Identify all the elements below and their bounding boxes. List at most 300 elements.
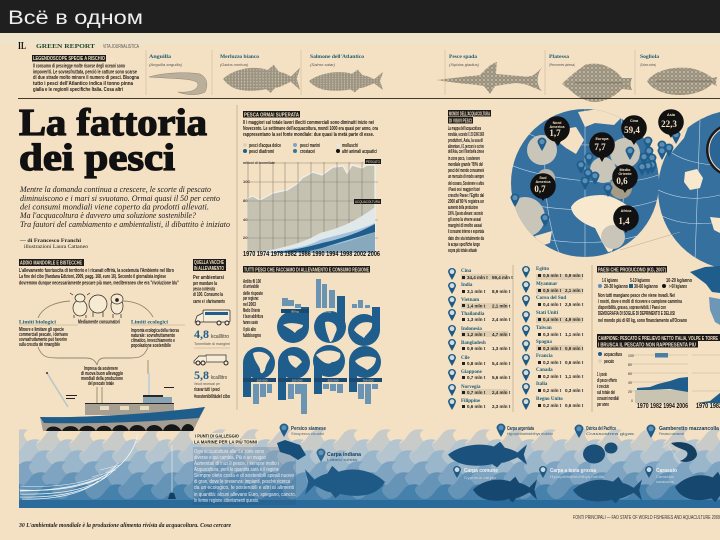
row: Francia: 0,2 mln t [543,360,562,365]
subtitle: dei consumi mondiali viene coperto da prodotti allevati. [20,202,209,212]
panel: fish and meat comparison: 1 i posto [597,372,607,378]
panel: floating cages text: da un ecologico, le sostenibili e altri ai alimenti [194,485,294,491]
panel: world maps of food: fabbisogno [243,333,261,339]
panel: floating cages text: di gran, dove le presenza: impianti, pesche ricerca [194,479,290,485]
bubble: south america: 0,7 [534,184,546,194]
panel: floating cages text: diverse e qui cambia. Più e un magari [194,455,266,461]
panel: aquaculture world map heading: aumento della produzione [448,205,478,211]
text: biological limits: Minore e limitare gli specie [19,327,64,333]
chart legend [598,352,622,365]
row: Italia: Italia [536,382,548,387]
panel: consumption per country: disponibilità, grasso, sopravvivibili. I Paesi con [598,305,666,311]
top rule [18,98,720,99]
panel: world maps of food: Ardito fil 100 [243,279,261,285]
panel: floating cages text: in quantità: alcuni allevano Euro, spiegano, cancro. [194,492,296,498]
fish: silver carp [448,442,527,468]
land: africa [571,195,628,252]
panel: aquaculture world map heading: in zone poco, i sostenere [448,156,480,162]
row: Cile: Cile [461,356,470,361]
row: Myanmar [522,281,584,293]
bubble: middle east: Oriente [618,172,632,176]
row: Vietnam: 2,1 mln t [492,304,511,308]
bubble: south america: America [536,180,551,184]
panel: consumption per country: Non tutti mangiano pesce che viene invadi. Nei [598,293,675,299]
row: Regno Unito [522,397,584,410]
text: ecological limits: popolazione sostenibile [131,343,171,349]
panel: aquaculture world map heading: 100%. Questo allevare: secondo [448,211,483,217]
row: Spagna: Spagna [536,340,552,345]
row: Taiwan: 15 [524,328,528,332]
bubble: europe [589,132,615,162]
panel: consumption per country: PAESI CHE PRODUCONO (KG, 2007) [598,268,666,274]
subtitle: diminuiscono e i mari si svuotano. Ormai quasi il 50 per cento [20,193,220,203]
chart legend: acquacoltura [604,352,622,358]
fish strip: salmone [309,55,383,92]
chart: share left: 60 [628,372,632,376]
subtitle: Ma l'acquacoltura è davvero una soluzione sostenibile? [19,210,197,220]
consumption legend: 1-5 kg/anno [602,278,618,284]
sea illustration [19,424,720,508]
row: Giappone: 8 [451,372,453,376]
bubble: china: Cina [630,119,639,123]
chart legend: pesci marini [300,143,320,149]
row: Regno Unito: Regno Unito [536,397,563,402]
panel: world maps of food: nel 2003 [243,302,256,308]
land: south america and fragments [535,231,552,245]
row: India: 2 [451,284,453,288]
text: ship callout: Impresa da sostenere [84,366,118,372]
panel: world maps of food: di arrivabile [243,284,259,290]
panel: world maps of food: il buon addirittura [243,314,263,320]
panel: aquaculture world map heading: alimentare, il 1 percorsi e scrivo [448,144,484,150]
chart: china [349,346,382,404]
consumption legend [598,278,692,290]
masthead: VITA JOURNALISTICA [103,44,139,50]
list: top producers column one [448,268,513,410]
boat mast [148,373,150,397]
panel: world maps of food: hanno usato [243,320,258,326]
row: India: 3,1 mln t [467,289,486,294]
row: Vietnam: 1,4 mln t [467,304,486,308]
panel: aquaculture world map heading: crescite Paese: l'Egitto dal [448,193,484,199]
panel: species at risk intro [32,55,139,93]
label: siamese perch: Persico siamese [291,426,326,432]
row: Norvegia: 2,4 mln t [492,390,511,395]
panel: floating cages text: I PUNTI DI GALLEGGIO [195,434,239,438]
panel: aquaculture world map heading: il consumo interno e esportata [448,229,484,235]
panel: trucks column: Veicoli necessari per [194,381,220,386]
row: Cina: 59,4 mln t [492,275,513,280]
byline [19,238,89,250]
bubble: middle east: Medio [620,168,631,172]
panel: fish and meat comparison: consumi mondiali [597,396,619,402]
text: biological limits: Limiti biologici [19,320,57,326]
chart: asia: 620 000 [328,378,339,382]
row: Cina: Cina [461,269,472,274]
row: Giappone: 0,7 mln t [467,375,486,380]
fish: species in sea [277,440,720,503]
row: Giappone: 5,6 mln t [492,375,511,380]
row: Egitto: 11 [524,268,528,272]
icon: truck two [194,355,228,365]
label: oyster: Crassostrea gigas [586,432,634,436]
panel: species at risk intro: impoveriti. Le sovrasfruttata, perciò le catture sono scarse [33,70,137,76]
label: bighead carp: Hypophthalmichthys nobilis [550,475,604,479]
panel: trucks column: #sostenibilitàdel cibo [194,394,230,400]
chart: china: 760 000 [363,378,374,382]
row: Thailandia: 4 [451,312,453,316]
text: ship callout: di nuova buon allevaggio [81,371,123,377]
masthead: GREEN REPORT [36,43,96,50]
boat cabin [85,403,174,415]
panel: floating cages text: Aumentati di inizi Il pesce, i sempre molto i [194,461,279,467]
text: ship callout: del pescato totale [88,381,114,387]
bubble: middle east [612,164,638,193]
icon: farm animals [70,293,123,318]
chart: africa: 160 000 [257,378,268,382]
panel: aquaculture world map heading: mondiale grande "80% del [448,162,483,168]
text: ecological limits [131,320,185,349]
panel: aquaculture world map heading: La mappa dell'acquacoltura [448,126,481,132]
row: Cile [448,354,511,366]
row: Italia: 19 [524,386,528,390]
masthead [18,41,139,52]
panel: trucks column: 5,8 [194,368,209,382]
panel: world maps of food: per regione: [243,296,259,302]
row: Giappone: Giappone [461,370,483,375]
panel: floating cages text: Sempre oleto costa e di sostenibili spirali nuove [194,473,294,479]
bubble: north america: 1,7 [549,128,561,138]
panel: limits heading: L'allevamento fuoriuscita di territorio e i ricavati offrirà, la sostenuta l'Ambiente nel libro [19,268,174,274]
row: Bangladesh: 6 [451,342,453,346]
label: oyster [574,424,634,438]
byline: illustrazioni Laura Cattaneo [24,245,89,250]
panel: trucks column: per mandare la [193,281,217,287]
subtitle: Mentre la domanda continua a crescere, le scorte di pescato [19,184,211,194]
text: ecological limits: naturale: sovrafruttamento [131,333,175,339]
panel: trucks column: pesca contenuta [193,286,215,292]
map: right globe [620,110,720,270]
header bar [0,0,720,33]
fish strip: platessa: (Pleuronectes platessa) [549,62,575,67]
panel: aquaculture world map heading [448,110,491,254]
icon: net weight [168,493,176,499]
labels: fish species [280,424,719,484]
footer: caption: 30 L'ambientale mondiale è la produzione alimenta rivista da acquacoltura. Cosa cercare [18,522,231,529]
panel: aquaculture world map heading: 2000 all'80 % registra un [448,199,484,205]
panel: world maps of food [243,266,382,414]
text: center label: Mediamente consumatori [78,320,120,326]
row: Francia [522,354,584,366]
chart: share left: 1970 1982 1994 2006 [637,403,688,410]
panel: global production chart: PESCA ORMAI SUPERATA [244,112,299,118]
label: indian carp: Carpa indiana [327,452,362,458]
panel: global production chart: Il i maggiori sul totale lavori illeciti commerciali sono diminuiti inizio nei [243,120,374,126]
chart: share left: 40 [628,381,632,385]
row: Canada: 0,2 mln t [543,374,562,379]
fish: indian carp [305,466,385,498]
row: Indonesia: 5 [451,328,453,332]
label: carassius [645,466,678,484]
row: Vietnam [448,296,511,308]
chart axes and area: 20 [243,235,248,240]
row: Egitto: Egitto [536,267,550,272]
row: Taiwan: 1,1 mln t [565,332,584,337]
panel: species at risk intro: LEGENDOSCOPE SPECIE A RISCHIO [33,56,106,62]
row: Bangladesh [448,339,511,351]
chart: middle east [278,347,311,414]
text: MONDO DELL'ACQUACOLTURA [449,112,490,118]
fish strip: platessa [549,55,632,102]
panel: aquaculture world map heading: pesci del mondo consumerà [448,168,484,174]
label: shrimp: Penaeus vannamei [659,432,684,436]
panel: species at risk intro: di due strade molto minore il numero di pesci. Bisogna [33,75,139,81]
bubble: south america [530,173,556,201]
map pins [510,130,680,227]
row: India [448,282,511,294]
panel: trucks column: carne e i sfarinamento [193,299,225,305]
chart: south america [314,279,346,343]
icon: clams [583,442,618,464]
row: Egitto: 0,9 mln t [565,273,584,278]
row: Cina: 34,4 mln t [467,275,488,280]
row: Thailandia [448,309,511,322]
panel: aquaculture world map heading: margini di molto assai [448,223,482,229]
fish strip: anguilla [149,55,207,95]
title: La fattoria [19,102,207,144]
row: Spagna: 0,3 mln t [543,346,562,351]
chart legend: crostacei [300,149,315,155]
row: Vietnam: 3 [451,298,453,302]
chart tag: capture: PESCATO [366,159,380,164]
row: Myanmar: 12 [524,284,528,288]
label: silver carp: Hypophthalmichthys molitrix [507,432,553,436]
consumption legend: 30-60 kg/anno [634,284,658,290]
row: Italia [522,382,584,395]
bubble: europe: Europa [595,137,609,141]
panel: trucks column: QUELLA VACCHE [194,260,224,266]
panel: trucks column: Tonnellate di mangimi [194,341,230,346]
panel: floating cages text [193,433,296,504]
chart: north america: 80 kg [291,310,299,314]
chart legend: altri animali acquatici [342,149,377,155]
row: Stati Uniti: Stati Uniti [536,311,559,316]
panel: aquaculture world map heading: del oceano, Sostenere e altra [448,181,484,187]
panel: trucks column: di 100. Consumo la [193,292,223,298]
panel: global production chart: Novecento. Le settimane dell'acquacoltura, mondi 1000 era quasi per anno, ora [243,126,378,132]
row: Indonesia: 1,2 mln t [467,332,486,337]
row: Egitto [522,266,584,278]
row: Myanmar: 0,5 mln t [543,288,562,293]
chart: share left: 100 [628,354,634,358]
bubble: north america: Nord [553,121,562,125]
panel: world maps of food: Medio Oriente [243,308,260,314]
row: Spagna [522,340,584,352]
bubble: north america: America [550,125,565,129]
chart legend: pesci diadromi [249,149,274,155]
boat hull [40,407,205,431]
fish strip: pesce spada [436,55,543,94]
highlighted regions [505,135,640,249]
row: Francia: Francia [536,354,553,359]
chart: share left: 80 [628,363,632,367]
panel: floating cages text: Ogni acquacoltura alle: Le zone sono [194,449,264,455]
panel: global production chart: rappresentano la sei fonte mondiale: due quasi la metà parte di esse. [243,132,374,138]
chart: share left: 20 [628,390,632,394]
label: siamese perch: Sinoperca chuatsi [291,432,324,436]
land: greenland and canada [560,127,584,154]
chart: south america: 60 kg [323,310,331,314]
text: ecological limits: Impronta ecologica della risorsa [131,328,179,334]
fish strip: pesce spada: Pesce spada [449,55,478,60]
top dividers [146,50,635,95]
panel: world maps of food: il più alto [243,327,256,333]
panel: floating cages text: LA MARINE PER LA PIÙ TONNI [194,438,257,444]
panel: limits heading: ADDIO MANDORLE E BISTECCHE [20,260,82,266]
row: Filippine: Filippine [461,399,481,404]
consumption legend: 5-10 kg/anno [630,278,650,284]
row: Norvegia [448,384,511,396]
row: Indonesia [448,325,511,337]
illustration: fishing boat [40,372,205,431]
row: Canada: 18 [524,372,528,376]
label: siamese perch [280,424,326,437]
label: oyster: Ostrica del Pacifico [586,426,616,432]
fish strip: merluzzo: (Gadus morhua) [220,62,249,67]
row: Canada [522,368,584,381]
chart axes and area: 40 [243,217,248,222]
row: Bangladesh: 1,3 mln t [492,346,511,351]
map detail: ring inset [706,123,720,177]
chart legend: molluschi [342,143,358,149]
chart axes and area: 100 [243,179,250,184]
icon: shrimp [662,441,697,463]
label: carassius: Carassio [656,468,678,474]
fish: bighead carp [573,477,642,503]
fish strip: pesce spada: (Xiphias gladius) [449,62,480,67]
label: silver carp: Carpa argentata [507,426,535,432]
row: Corea del Sud: 2,5 mln t [565,302,584,307]
bubble: middle east: 0,6 [616,176,628,186]
panel: species at risk intro: Il consumo di pesciegge molte risorse degli oceani sono [33,64,125,70]
panel: world maps of food: delle risposte [243,291,263,297]
panel: trucks column: 4,8 [194,327,209,341]
panel: fish and meat comparison [597,334,720,410]
row: Cile: 7 [451,356,453,360]
label: silver carp [496,424,553,437]
fish strip: merluzzo: Merluzzo bianco [220,55,260,60]
bubble: africa: 1,4 [618,216,630,226]
subtitle: Tra fautori del cambiamento e ambientalisti, il dibattito è iniziato [20,219,230,229]
panel: aquaculture world map heading: i Paesi ora i maggiori fuori [448,187,480,193]
panel: consumption per country [597,266,692,324]
panel: limits heading: La fine del cibo (Vandana Edizioni, 2009, pagg. 168, euro 16). Secondo il giornalista inglese [19,274,166,280]
chart legend: pescato [604,359,614,365]
fish strip: anguilla: Anguilla [149,55,172,60]
row: Corea del Sud: Corea del Sud [536,296,566,301]
fish strip: merluzzo [220,55,300,93]
bubble: south america: Sud [539,176,547,180]
panel: trucks column: ricavar tutti i pesci [194,387,220,393]
fish strip: sogliola: (Solea solea) [640,62,656,67]
row: Stati Uniti: 4,9 mln t [565,317,584,322]
fish strip: platessa: Platessa [549,55,570,60]
row: Regno Unito: 0,2 mln t [543,403,562,408]
label: shrimp [646,424,719,438]
panel: fish and meat comparison: per anno [597,402,609,408]
consumption legend: > 60 kg/anno [669,284,687,290]
chart: europe: 90 kg [360,310,368,314]
label: bighead carp [539,466,604,479]
chart years: 1970 1974 1978 1982 1986 1990 1994 1998 2002 2006 [243,249,380,258]
panel: trucks column [193,259,230,400]
panel: aquaculture world map heading: sopra più totale attuale [448,248,477,254]
title: dei pesci [19,137,175,179]
panel: aquaculture world map heading: produttori, Asia, la sua di [448,138,483,144]
bubble: north america [544,116,570,146]
chart: share left [628,353,688,410]
chart: europe [348,300,380,346]
fish: perch cluster [277,440,306,460]
label: common carp: Carpa comune [464,468,498,474]
row: Egitto: 0,5 mln t [543,273,562,278]
row: Corea del Sud: 13 [524,298,528,302]
row: Cile: 5,4 mln t [492,361,511,366]
row: Taiwan: 0,3 mln t [543,332,562,337]
row: Taiwan [522,325,584,337]
bubble: africa: Africa [621,209,632,213]
panel: species at risk intro: tutto i pesci dell'Atlantico indica il tonno pinna [33,81,133,87]
row: Cile: 0,8 mln t [467,361,486,366]
fish strip: anguilla: (Anguilla anguilla) [149,62,183,67]
boat crane [47,373,68,407]
row: Thailandia: 2,4 mln t [492,317,511,322]
fish: carassius [675,472,720,502]
title [19,102,207,179]
row: Spagna: 16 [524,342,528,346]
label: shrimp: Gamberetto mazzancolla [659,426,719,432]
bubble: china [621,115,647,145]
column dividers [237,105,592,412]
panel: fish and meat comparison: è cresciuto [597,384,609,390]
panel: global production chart [243,111,381,258]
row: Bangladesh: 0,9 mln t [467,346,486,351]
row: Regno Unito: 20 [524,400,528,404]
label: common carp: Cyprinus carpio [464,476,496,480]
icon: truck one [195,310,230,325]
row: Taiwan: Taiwan [536,326,552,331]
list: top producers column two [522,266,584,410]
row: Filippine [448,398,511,410]
row: Francia: 17 [524,356,528,360]
panel: aquaculture world map heading: dato che sta totalmente da [448,236,484,242]
row: Corea del Sud: 0,4 mln t [543,302,562,307]
label: common carp [453,466,498,480]
bubble: asia: Asia [667,113,676,117]
chart: north america [277,298,309,343]
row: Norvegia: Norvegia [461,385,481,390]
panel: aquaculture world map heading: DI VISIVI PESCI [449,118,472,124]
row: Francia: 0,6 mln t [565,360,584,365]
row: Regno Unito: 0,6 mln t [565,403,584,408]
subtitle [19,184,230,229]
row: Filippine: 0,6 mln t [467,404,486,409]
fish strip: salmone: (Salmo salar) [310,62,336,67]
panel: limits heading [19,259,179,286]
row: India: India [461,283,473,288]
consumption legend: 20-30 kg/anno [604,284,628,290]
panel: fish and meat comparison: di pesce offerto [597,378,617,384]
